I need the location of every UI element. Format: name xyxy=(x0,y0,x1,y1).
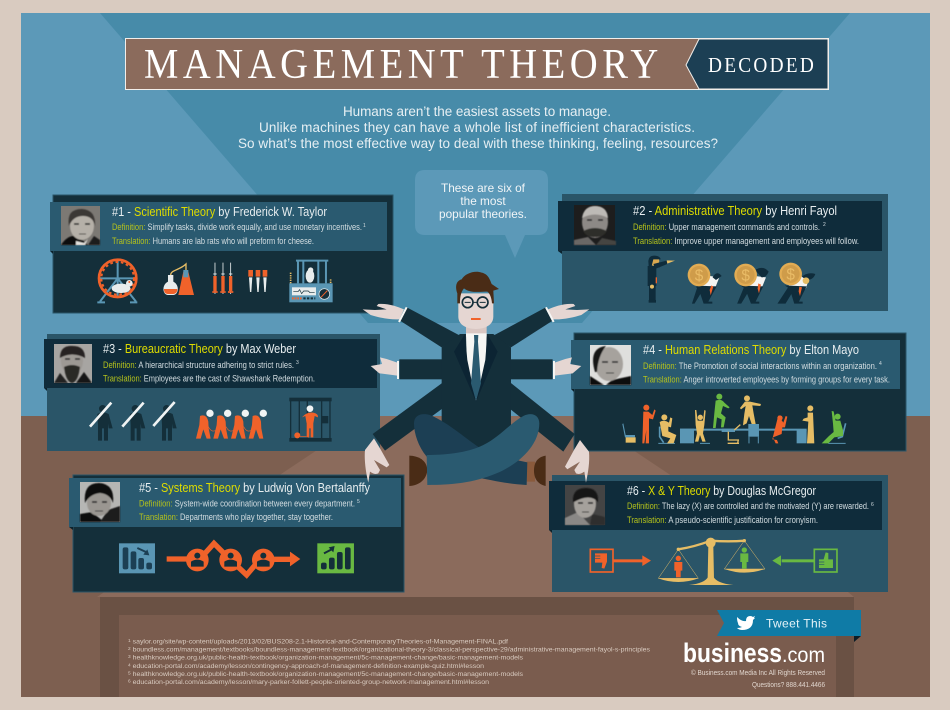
footnotes: saylor.org/site/wp-content/uploads/2013/02/BUS208-2.1-Historical-and-ContemporaryTheories-of-Management-FINAL.pdf xyxy=(131,638,508,646)
tweet ribbon xyxy=(717,610,861,642)
icon: seated green figure xyxy=(822,411,843,443)
panel: X and Y theory xyxy=(549,475,888,592)
icon: seated yellow figures xyxy=(626,405,814,443)
panel: administrative theory xyxy=(558,194,888,311)
panel: scientific theory xyxy=(50,195,393,313)
icon: droppers xyxy=(248,270,267,292)
icon: standing orange figure xyxy=(642,405,656,443)
icon: rat testing machine xyxy=(289,261,333,302)
icon: flasks xyxy=(163,264,194,295)
title banner xyxy=(126,38,828,90)
panel: systems theory: 5 xyxy=(357,499,360,505)
brand logo and contact: .com xyxy=(782,644,825,667)
portrait: Frederick W. Taylor xyxy=(61,206,100,245)
icons: office group meeting xyxy=(622,394,846,443)
icon: declining chart xyxy=(119,543,155,573)
footnotes: 6 xyxy=(128,679,131,684)
icon: shirt cuffs xyxy=(398,307,554,379)
icon: suit arms and torso xyxy=(373,308,575,452)
speech bubble: popular theories. xyxy=(439,207,527,221)
brand logo and contact xyxy=(683,638,825,689)
portrait: Max Weber xyxy=(54,344,92,383)
icon: shirt and tie xyxy=(454,333,498,402)
translation: Translation: Anger introverted employees by forming groups for every task. xyxy=(643,374,890,386)
footnotes: healthknowledge.org.uk/public-health-textbook/organization-management/5c-management-change/basic-management-models xyxy=(131,655,524,662)
footnotes xyxy=(128,638,651,686)
heading: #6 - X & Y Theory by Douglas McGregor xyxy=(627,484,816,498)
panel: human relations theory: 4 xyxy=(879,361,882,367)
brand logo and contact: © Business.com Media Inc All Rights Reserved xyxy=(691,668,825,677)
icon: meeting table xyxy=(622,423,846,443)
panel: administrative theory: 2 xyxy=(823,222,826,228)
speech bubble xyxy=(415,170,548,258)
footnotes: education-portal.com/academy/lesson/contingency-approach-of-management-definition-example-quiz.html#lesson xyxy=(131,663,484,670)
panel: bureaucratic theory xyxy=(44,334,380,451)
icon: rising chart xyxy=(317,543,354,573)
icon: coin carrier 1: $ xyxy=(695,267,704,284)
icons: guards and prisoners xyxy=(90,398,332,442)
portrait: Ludwig Von Bertalanffy xyxy=(80,482,120,522)
portrait: Elton Mayo xyxy=(590,345,631,385)
subtitle text: DECODED xyxy=(708,54,814,77)
icon: jumping green figure xyxy=(713,394,730,428)
tweet label: Tweet This xyxy=(766,616,827,630)
icon: hands xyxy=(363,304,589,483)
footnotes: 2 xyxy=(128,646,131,651)
footnotes: education-portal.com/academy/lesson/mary-parker-follett-people-oriented-group-network-management.html#lesson xyxy=(131,679,489,686)
icon: coin carrier 2: $ xyxy=(741,267,750,284)
footnotes: 5 xyxy=(128,670,131,676)
icons: lab experiments xyxy=(97,260,333,302)
icon: hamster wheel xyxy=(97,260,137,302)
icon: twitter bird xyxy=(737,616,755,630)
desk xyxy=(100,592,854,697)
speech bubble: These are six of xyxy=(441,181,526,195)
heading: #3 - Bureaucratic Theory by Max Weber xyxy=(103,342,296,356)
footnotes: 1 xyxy=(128,638,131,643)
icons: thumbs and scale xyxy=(590,538,837,585)
icon: coin carrier 3: $ xyxy=(786,266,795,283)
translation: Translation: A pseudo-scientific justification for cronyism. xyxy=(627,515,818,526)
speech bubble: the most xyxy=(460,194,506,208)
translation: Translation: Humans are lab rats who will preform for cheese. xyxy=(112,236,314,247)
heading: #2 - Administrative Theory by Henri Fayol xyxy=(633,204,837,218)
icon: neck and face xyxy=(456,272,499,337)
footnotes: 3 xyxy=(128,654,131,659)
footnotes: boundless.com/management/textbooks/boundless-management-textbook/organizational-theory-3/classical-perspective-29/administrative-management-fayol-s-principles xyxy=(131,646,651,654)
icon: coin carrier 1 xyxy=(688,264,722,303)
icon: coin carrier 2 xyxy=(734,264,769,303)
icon: shoes xyxy=(409,456,546,486)
icon: crossed legs xyxy=(414,414,539,485)
portrait: Douglas McGregor xyxy=(565,485,605,525)
icon: jumping yellow figure xyxy=(740,395,761,425)
translation: Translation: Improve upper management and employees will follow. xyxy=(633,236,859,247)
translation: Translation: Departments who play together, stay together. xyxy=(139,512,333,523)
definition: Definition: The Promotion of social interactions within an organization. xyxy=(643,361,877,372)
definition: Definition: Simplify tasks, divide work equally, and use monetary incentives. xyxy=(112,222,362,233)
footnotes: healthknowledge.org.uk/public-health-textbook/organization-management/5c-management-change/basic-management-models xyxy=(131,671,524,678)
panel: X and Y theory: 6 xyxy=(871,502,874,508)
translation: Translation: Employees are the cast of Shawshank Redemption. xyxy=(103,374,315,384)
icons: boss and coin carriers xyxy=(648,256,815,303)
icon: chained prisoners xyxy=(196,410,267,439)
icon: guards xyxy=(90,402,177,441)
icon: thumbs down xyxy=(590,549,651,572)
definition: Definition: A hierarchical structure adhering to strict rules. xyxy=(103,360,294,371)
heading: #4 - Human Relations Theory by Elton Mayo xyxy=(643,343,859,357)
heading: #1 - Scientific Theory by Frederick W. Taylor xyxy=(112,205,327,219)
portrait: Henri Fayol xyxy=(574,205,616,245)
heading: #5 - Systems Theory by Ludwig Von Bertalanffy xyxy=(139,481,371,495)
definition: Definition: The lazy (X) are controlled and the motivated (Y) are rewarded. xyxy=(627,501,869,512)
brand logo and contact: Questions? 888.441.4466 xyxy=(752,680,825,689)
title text: MANAGEMENT THEORY xyxy=(144,41,658,87)
intro text xyxy=(238,104,718,151)
icon: jail cell xyxy=(289,398,332,442)
intro text: Humans aren’t the easiest assets to manage. xyxy=(343,104,611,119)
central manager figure xyxy=(363,272,589,486)
icon: seated orange figure xyxy=(772,415,787,443)
panel: scientific theory: 1 xyxy=(363,223,366,229)
icon: team workflow arrow xyxy=(167,543,300,575)
icon: thumbs up xyxy=(772,549,837,572)
definition: Definition: Upper management commands and controls. xyxy=(633,222,820,233)
panel: human relations theory xyxy=(571,333,906,451)
intro text: Unlike machines they can have a whole list of inefficient characteristics. xyxy=(259,120,695,135)
icon: coin carrier 3 xyxy=(779,263,815,303)
icon: balance scale xyxy=(658,538,765,585)
icon: syringes xyxy=(212,263,233,294)
footnotes: 4 xyxy=(128,662,131,667)
panel: systems theory xyxy=(69,475,404,592)
icon: pointing boss xyxy=(648,256,675,303)
icons: system flow xyxy=(119,543,354,575)
brand logo and contact: business xyxy=(683,638,782,668)
intro text: So what’s the most effective way to deal with these thinking, feeling, resources? xyxy=(238,136,718,151)
definition: Definition: System-wide coordination between every department. xyxy=(139,498,355,510)
panel: bureaucratic theory: 3 xyxy=(296,360,299,366)
